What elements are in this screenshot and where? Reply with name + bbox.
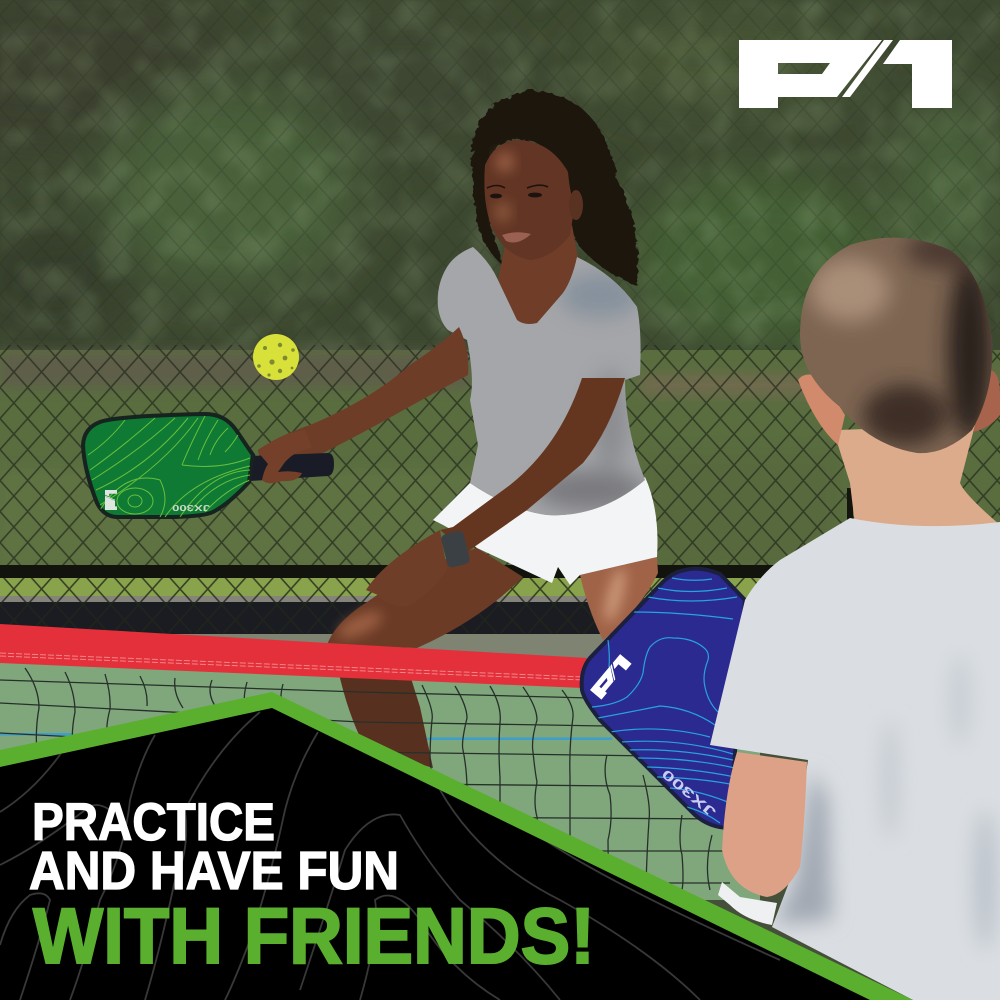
forearm bbox=[440, 378, 625, 552]
far leg bbox=[580, 557, 658, 640]
blue court lines bbox=[0, 733, 73, 736]
fence base rail bbox=[0, 565, 1000, 578]
contour lines bbox=[0, 712, 780, 1000]
boy ear bbox=[798, 374, 845, 445]
boy t-shirt bbox=[710, 518, 1000, 1000]
hair bbox=[472, 90, 638, 285]
boy in foreground bbox=[710, 230, 1000, 1000]
green border bbox=[0, 692, 913, 1000]
t-shirt shading bbox=[775, 655, 997, 950]
paddle logo bbox=[105, 490, 117, 510]
hair shading bbox=[810, 230, 995, 445]
paddle handle bbox=[250, 453, 334, 481]
girl player bbox=[258, 90, 658, 768]
neck and chest bbox=[498, 225, 578, 324]
paddle model name: JX300 bbox=[171, 503, 210, 512]
skin highlights bbox=[334, 566, 630, 643]
ear bbox=[569, 190, 583, 220]
facial shading and features bbox=[487, 151, 548, 242]
t-shirt bbox=[438, 247, 645, 515]
hand gripping handle bbox=[258, 430, 312, 483]
boy hair bbox=[800, 238, 992, 453]
court surface bbox=[0, 634, 760, 664]
heading line 3: WITH FRIENDS! bbox=[33, 891, 595, 980]
heading line 2: AND HAVE FUN bbox=[29, 841, 399, 901]
clasped hand bbox=[366, 530, 447, 607]
blue paddle bbox=[582, 569, 745, 828]
paddle face bbox=[582, 569, 745, 828]
pickleball bbox=[253, 334, 299, 380]
paddle contour lines bbox=[592, 578, 737, 823]
t-shirt shading bbox=[535, 273, 645, 510]
paddle logo bbox=[590, 654, 632, 700]
lower leg bbox=[336, 660, 433, 768]
gravel and stones bbox=[0, 596, 620, 603]
shorts bbox=[433, 477, 658, 585]
paddle face bbox=[83, 414, 253, 517]
bottom banner bbox=[0, 692, 913, 1000]
near arm holding paddle bbox=[258, 327, 468, 470]
green paddle with hand bbox=[83, 414, 334, 517]
red net band bbox=[0, 624, 587, 688]
boy arm bbox=[722, 752, 807, 897]
logo: P1 bbox=[739, 40, 952, 108]
boy neck bbox=[838, 425, 1000, 535]
paddle model name: JX300 bbox=[659, 766, 719, 820]
heading line 1: PRACTICE bbox=[32, 793, 275, 852]
grass strip behind fence bbox=[0, 578, 760, 598]
face bbox=[484, 140, 575, 260]
fence post bbox=[847, 488, 853, 523]
net mesh bbox=[0, 668, 730, 890]
smartwatch bbox=[440, 530, 471, 568]
black panel bbox=[0, 708, 870, 1000]
near thigh and knee bbox=[327, 548, 523, 648]
paddle contour lines bbox=[88, 416, 250, 517]
chain-link fence bbox=[0, 0, 1000, 345]
shoe bbox=[718, 882, 777, 925]
far ear bbox=[973, 370, 1000, 432]
